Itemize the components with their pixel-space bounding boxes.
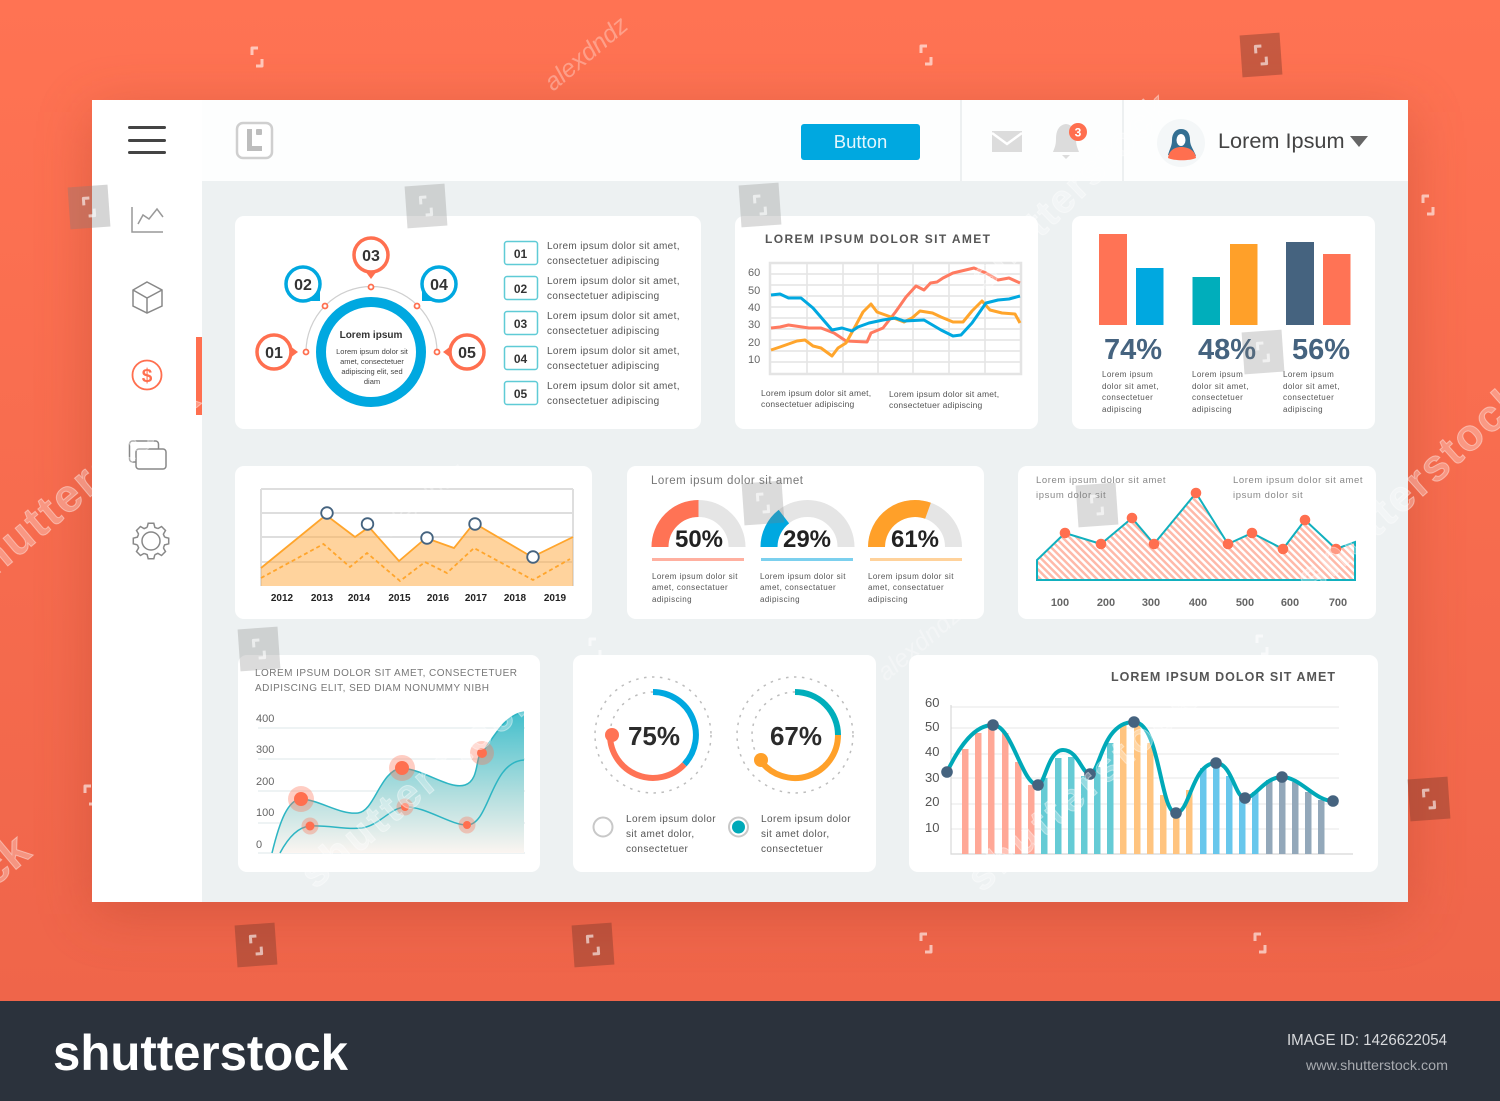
text blocks: ipsum dolor sit [1233, 490, 1303, 501]
percentages [1104, 334, 1350, 366]
list: consectetuer adipiscing [547, 396, 660, 407]
window shadow [92, 112, 1408, 914]
panel: bars with curve [909, 655, 1378, 872]
gauge 50%: 50% [675, 526, 723, 553]
icon: bell with badge: 3 [1075, 126, 1082, 140]
y axis labels: 20 [925, 794, 939, 809]
captions: Lorem ipsum dolor sit amet, [761, 388, 871, 398]
radio option 1: consectetuer [626, 844, 689, 855]
icon: cards [130, 441, 166, 469]
x axis labels [1051, 597, 1347, 609]
captions: consectetuer adipiscing [761, 399, 855, 409]
heading: LOREM IPSUM DOLOR SIT AMET [1111, 670, 1335, 684]
captions: Lorem ipsum [1283, 370, 1334, 379]
icon: bell with badge [1053, 123, 1087, 159]
panel: gradient area chart [238, 655, 540, 872]
y axis labels: 50 [925, 719, 939, 734]
y axis labels: 60 [925, 695, 939, 710]
radio option 1 [594, 814, 716, 855]
watermark text: shutterstock [959, 679, 1204, 900]
list: consectetuer adipiscing [547, 291, 660, 302]
y axis labels: 400 [256, 713, 274, 725]
x axis labels: 100 [1051, 597, 1069, 609]
sidebar [92, 100, 202, 902]
year labels: 2012 [271, 593, 294, 604]
list: 01 [514, 247, 527, 261]
line chart [770, 263, 1021, 374]
year labels: 2018 [504, 593, 527, 604]
list: 04 [514, 352, 527, 366]
y axis labels [925, 695, 939, 835]
captions [761, 388, 999, 410]
icon: gear [133, 523, 169, 559]
panel: multi line chart [735, 216, 1038, 429]
logo [237, 123, 272, 158]
captions: Lorem ipsum [1102, 370, 1153, 379]
icon: avatar [1157, 119, 1205, 167]
icon: line chart [132, 207, 163, 232]
content background [92, 100, 1408, 902]
percentages: 56% [1292, 334, 1350, 366]
icon: cube [133, 282, 162, 313]
heading [255, 668, 517, 694]
list: Lorem ipsum dolor sit amet, [547, 346, 680, 357]
top bar [202, 100, 1408, 181]
arc with dots [304, 284, 440, 354]
pin 01: 01 [265, 345, 283, 362]
pin 01 [257, 335, 298, 369]
list: 05 [514, 387, 527, 401]
panel: radial steps [235, 216, 701, 429]
radio option 1: Lorem ipsum dolor [626, 814, 716, 825]
captions [1102, 370, 1340, 414]
bar chart [1099, 234, 1350, 325]
pin 04: 04 [430, 277, 448, 294]
icon: dropdown arrow [1350, 136, 1368, 147]
radio option 2: Lorem ipsum dolor [761, 814, 851, 825]
captions: adipiscing [1192, 405, 1232, 414]
captions: adipiscing [652, 595, 692, 604]
heading: ADIPISCING ELIT, SED DIAM NONUMMY NIBH [255, 683, 489, 694]
watermark text: alexdndz [539, 10, 634, 97]
area chart [261, 489, 573, 586]
y axis labels: 50 [748, 285, 760, 297]
captions: amet, consectatuer [760, 583, 836, 592]
center ring: Lorem ipsum [340, 330, 402, 341]
donut 67%: 67% [770, 721, 822, 751]
donut 75% [595, 677, 711, 793]
y axis labels: 30 [925, 770, 939, 785]
captions: dolor sit amet, [1283, 382, 1340, 391]
y axis labels: 100 [256, 807, 274, 819]
watermark text: shutterstock [961, 84, 1180, 298]
list: Lorem ipsum dolor sit amet, [547, 381, 680, 392]
icon: dollar: $ [142, 366, 153, 387]
percentages: 48% [1198, 334, 1256, 366]
area chart [258, 712, 525, 853]
gauge 61%: 61% [891, 526, 939, 553]
pin 03 [354, 238, 388, 279]
captions: adipiscing [760, 595, 800, 604]
list: 03 [514, 317, 527, 331]
list: 02 [514, 282, 527, 296]
captions: consectetuer [1102, 393, 1153, 402]
watermark text: alexdndz [376, 456, 471, 543]
panel: paired bars with percentages [1072, 216, 1375, 429]
y axis labels: 40 [925, 744, 939, 759]
year labels: 2017 [465, 593, 488, 604]
y axis labels: 20 [748, 337, 760, 349]
list: consectetuer adipiscing [547, 326, 660, 337]
footer logo: shutterstock [53, 1025, 348, 1081]
captions: adipiscing [868, 595, 908, 604]
gauge 29% [761, 508, 853, 561]
x axis labels: 600 [1281, 597, 1299, 609]
captions: consectetuer [1192, 393, 1243, 402]
panel: gauges [627, 466, 984, 619]
gauge 50% [652, 508, 744, 561]
center ring: amet, consectetuer [340, 357, 404, 366]
y axis labels: 30 [748, 319, 760, 331]
image id: IMAGE ID: 1426622054 [1287, 1032, 1447, 1049]
icon: dollar [132, 360, 162, 390]
icon: mail [992, 131, 1022, 152]
y axis labels [256, 713, 274, 851]
y axis labels: 10 [748, 354, 760, 366]
text blocks: ipsum dolor sit [1036, 490, 1106, 501]
x axis labels: 400 [1189, 597, 1207, 609]
year labels: 2015 [388, 593, 411, 604]
list: Lorem ipsum dolor sit amet, [547, 311, 680, 322]
pin 05 [443, 335, 484, 369]
site url: www.shutterstock.com [1305, 1057, 1448, 1073]
year labels: 2013 [311, 593, 334, 604]
button: Button [834, 131, 887, 152]
y axis labels: 0 [256, 839, 262, 851]
y axis labels: 300 [256, 744, 274, 756]
watermark text: shutterstock [291, 674, 543, 897]
year labels [271, 593, 567, 604]
y axis labels: 10 [925, 820, 939, 835]
panel: hatched area chart [1018, 466, 1376, 619]
icon: menu [128, 126, 166, 154]
list: Lorem ipsum dolor sit amet, [547, 276, 680, 287]
watermark squares [68, 33, 1450, 967]
captions: adipiscing [1283, 405, 1323, 414]
captions: Lorem ipsum dolor sit amet, [889, 389, 999, 399]
x axis labels: 500 [1236, 597, 1254, 609]
donut 67% [737, 677, 853, 793]
user name: Lorem Ipsum [1218, 128, 1345, 153]
pin 03: 03 [362, 248, 380, 265]
donut 75%: 75% [628, 721, 680, 751]
watermark text: alexdndz [872, 600, 967, 687]
year labels: 2014 [348, 593, 371, 604]
radio option 2 [729, 814, 851, 855]
panel: area chart by year [235, 466, 592, 619]
list: Lorem ipsum dolor sit amet, [547, 241, 680, 252]
list: consectetuer adipiscing [547, 361, 660, 372]
area chart [1037, 488, 1355, 580]
radio option 1: sit amet dolor, [626, 829, 695, 840]
gauge 29%: 29% [783, 526, 831, 553]
y axis labels: 200 [256, 776, 274, 788]
year labels: 2019 [544, 593, 567, 604]
pin 05: 05 [458, 345, 476, 362]
text blocks: Lorem ipsum dolor sit amet [1036, 475, 1166, 486]
heading: LOREM IPSUM DOLOR SIT AMET [765, 232, 991, 246]
percentages: 74% [1104, 334, 1162, 366]
panel: donut charts [573, 655, 876, 872]
captions: Lorem ipsum dolor sit [760, 572, 846, 581]
captions: consectetuer [1283, 393, 1334, 402]
center ring [321, 302, 421, 402]
captions: Lorem ipsum dolor sit [652, 572, 738, 581]
text blocks: Lorem ipsum dolor sit amet [1233, 475, 1363, 486]
list: consectetuer adipiscing [547, 256, 660, 267]
footer bar [0, 1001, 1500, 1101]
y axis labels: 60 [748, 267, 760, 279]
captions [652, 572, 954, 604]
captions: Lorem ipsum dolor sit [868, 572, 954, 581]
captions: consectetuer adipiscing [889, 400, 983, 410]
heading: Lorem ipsum dolor sit amet [651, 475, 804, 487]
chart [941, 705, 1353, 854]
x axis labels: 700 [1329, 597, 1347, 609]
center ring: Lorem ipsum dolor sit [336, 347, 409, 356]
center ring: diam [364, 377, 380, 386]
y axis labels [748, 267, 760, 366]
captions: amet, consectatuer [652, 583, 728, 592]
captions: Lorem ipsum [1192, 370, 1243, 379]
year labels: 2016 [427, 593, 450, 604]
dashboard window [92, 100, 1408, 902]
active indicator [196, 337, 202, 415]
captions: amet, consectatuer [868, 583, 944, 592]
captions: adipiscing [1102, 405, 1142, 414]
x axis labels: 200 [1097, 597, 1115, 609]
gauge 61% [870, 508, 962, 561]
x axis labels: 300 [1142, 597, 1160, 609]
pin 02 [286, 267, 320, 301]
heading: LOREM IPSUM DOLOR SIT AMET, CONSECTETUER [255, 668, 517, 679]
pin 02: 02 [294, 277, 312, 294]
radio option 2: sit amet dolor, [761, 829, 830, 840]
radio option 2: consectetuer [761, 844, 824, 855]
list [504, 241, 680, 407]
pin 04 [422, 267, 456, 301]
text blocks [1036, 475, 1363, 501]
center ring: adipiscing elit, sed [341, 367, 403, 376]
button [801, 124, 920, 160]
captions: dolor sit amet, [1192, 382, 1249, 391]
captions: dolor sit amet, [1102, 382, 1159, 391]
y axis labels: 40 [748, 302, 760, 314]
